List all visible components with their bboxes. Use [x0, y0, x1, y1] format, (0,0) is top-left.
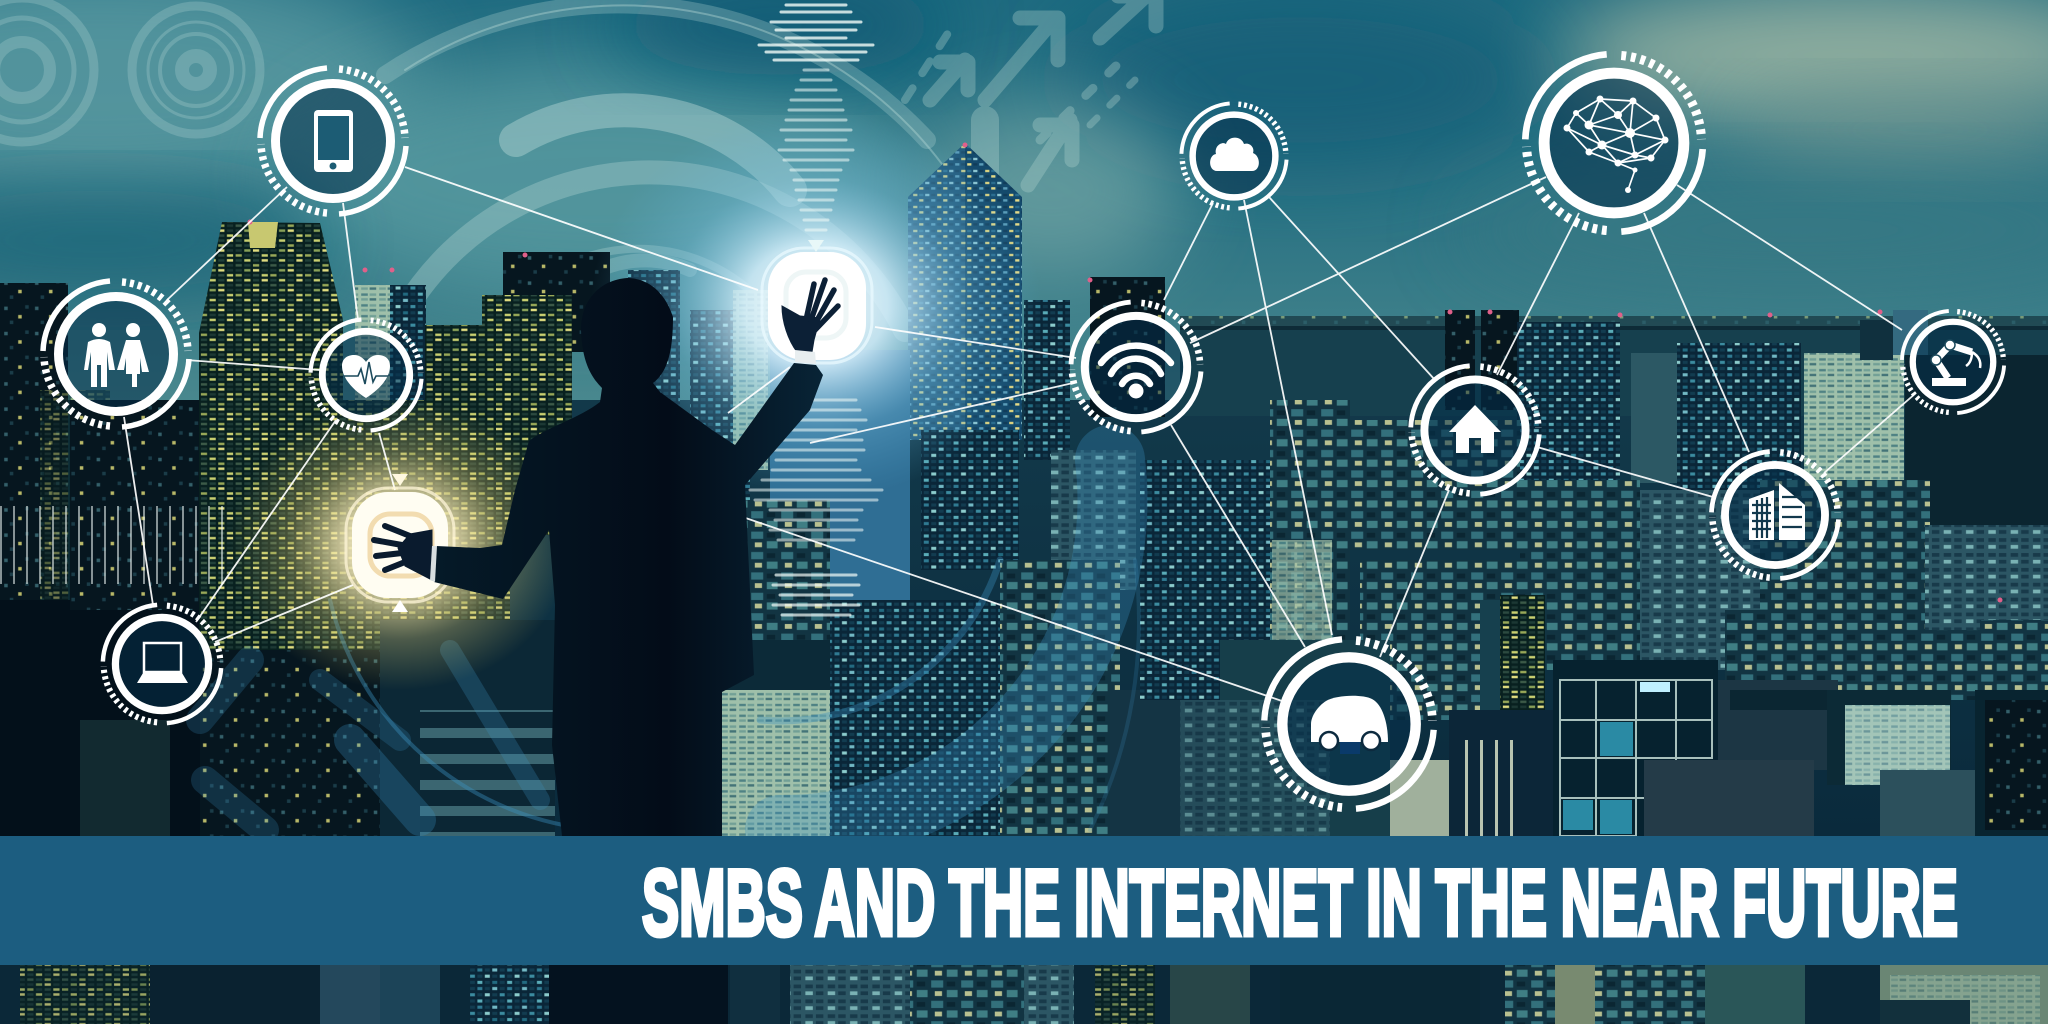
centre buildings	[908, 143, 1022, 440]
icon node: cloud	[1181, 103, 1287, 209]
overlay: lower blue arcs	[200, 460, 1139, 830]
left shirt cuff	[430, 546, 437, 582]
icon node: AI brain network	[1525, 54, 1703, 232]
touch button: lower	[346, 474, 454, 612]
icon node: people	[43, 281, 189, 427]
overlay: vertical barcode stripes	[750, 5, 882, 615]
icon node: laptop	[103, 605, 221, 723]
right skyline	[1445, 310, 1475, 410]
background: night sky	[0, 0, 2048, 440]
icon node: wifi	[1071, 302, 1201, 432]
overlay: arrows	[905, 0, 1156, 185]
icon node: office buildings	[1711, 451, 1839, 579]
bottom strip of city below banner	[0, 965, 2048, 1024]
glow: upper touch button light	[591, 110, 1041, 500]
connection lines between icons	[124, 167, 1916, 701]
title banner	[0, 836, 2048, 965]
icon node: smartphone	[260, 68, 406, 214]
overlay: wifi-style arcs	[385, 4, 960, 330]
icon node: home	[1411, 366, 1539, 494]
city skyline	[0, 143, 2048, 843]
businessman silhouette	[374, 278, 838, 1024]
overlay: left vertical barcode stripes	[0, 506, 225, 584]
icon node: robot arm	[1902, 311, 2004, 413]
icon node: heart rate	[311, 320, 421, 430]
left hand	[374, 526, 432, 580]
overlay: faint HUD rings in the sky	[0, 0, 260, 142]
right hand	[782, 280, 838, 352]
city lights along the horizon	[248, 142, 2002, 602]
right shirt cuff	[795, 350, 816, 364]
glow: lower touch button light	[230, 400, 570, 690]
touch button: upper	[762, 240, 872, 363]
left buildings	[0, 283, 68, 843]
icon node: car	[1264, 639, 1434, 809]
